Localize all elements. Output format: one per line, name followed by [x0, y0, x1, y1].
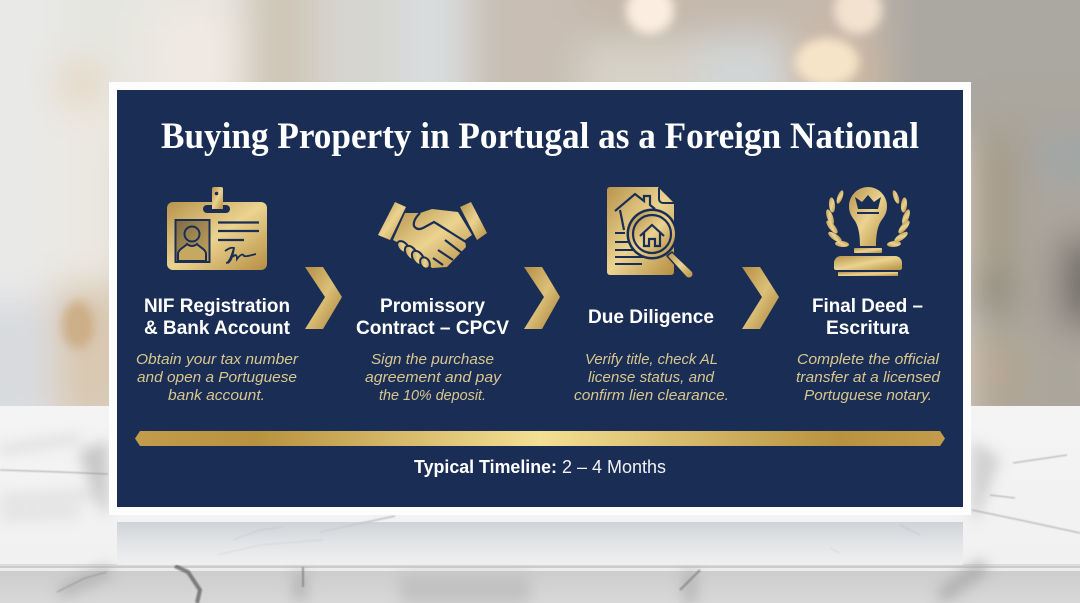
description: Sign the purchase — [371, 351, 494, 368]
heading — [144, 295, 290, 339]
description: and open a Portuguese — [137, 369, 297, 386]
timeline label: 2 – 4 Months — [562, 456, 666, 477]
icon: handshake — [378, 202, 487, 270]
step 3: due diligence — [574, 187, 729, 404]
icon: document with magnifier — [607, 187, 693, 278]
panel reflection on marble — [117, 522, 963, 565]
heading: NIF Registration — [144, 295, 290, 317]
heading — [812, 295, 923, 339]
description: transfer at a licensed — [796, 369, 941, 386]
description: license status, and — [588, 369, 715, 386]
description: Complete the official — [797, 351, 940, 368]
description: confirm lien clearance. — [574, 387, 729, 404]
description — [796, 351, 941, 404]
marble counter — [0, 406, 1080, 603]
arrow 2 — [524, 267, 560, 329]
heading: Final Deed – — [812, 295, 923, 317]
heading: Due Diligence — [588, 306, 714, 328]
step 2: promissory contract — [356, 202, 509, 404]
description: the 10% deposit. — [379, 387, 486, 404]
arrow 3 — [742, 267, 779, 329]
heading: Escritura — [826, 317, 909, 339]
blurred interior background — [0, 0, 1080, 460]
panel: white frame — [109, 82, 971, 515]
icon: ID card — [167, 187, 267, 270]
heading — [356, 295, 509, 339]
step 4: final deed — [796, 187, 941, 404]
timeline label: Typical Timeline: — [414, 456, 557, 477]
icon: notary stamp with laurel — [824, 187, 912, 276]
heading: & Bank Account — [144, 317, 290, 339]
step 1: NIF registration — [136, 187, 299, 404]
description — [136, 351, 299, 404]
heading: Contract – CPCV — [356, 317, 509, 339]
title: Buying Property in Portugal as a Foreign National — [161, 116, 919, 157]
description: Portuguese notary. — [804, 387, 932, 404]
panel: navy infographic — [117, 90, 963, 507]
description — [365, 351, 503, 404]
description: Verify title, check AL — [585, 351, 718, 368]
description: agreement and pay — [365, 369, 503, 386]
timeline label — [414, 456, 666, 477]
description: bank account. — [168, 387, 265, 404]
description — [574, 351, 729, 404]
heading: Promissory — [380, 295, 485, 317]
arrow 1 — [305, 267, 342, 329]
description: Obtain your tax number — [136, 351, 299, 368]
timeline bar — [135, 431, 945, 446]
